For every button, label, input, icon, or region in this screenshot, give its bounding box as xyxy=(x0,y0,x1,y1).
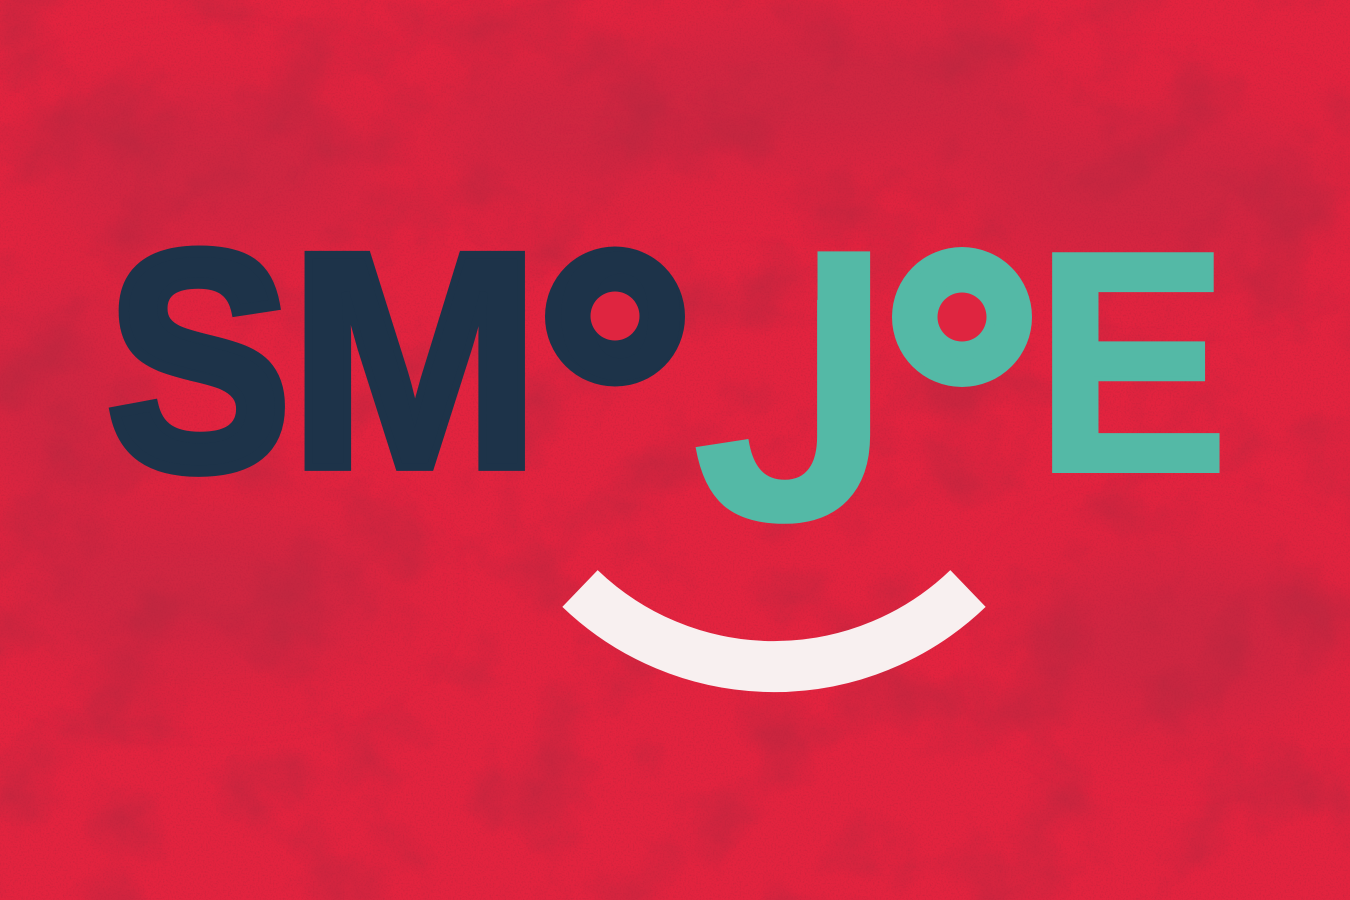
word: Joe xyxy=(696,247,1220,524)
letter S: S xyxy=(107,188,291,535)
smile arc xyxy=(580,588,968,667)
letter o: o xyxy=(552,166,689,428)
letter E: E xyxy=(1035,187,1229,538)
letter J: J xyxy=(690,167,895,603)
letter M: M xyxy=(288,188,541,532)
word: Smo xyxy=(107,166,689,535)
letter o: o xyxy=(900,167,1036,429)
logo wordmark xyxy=(108,246,1220,524)
